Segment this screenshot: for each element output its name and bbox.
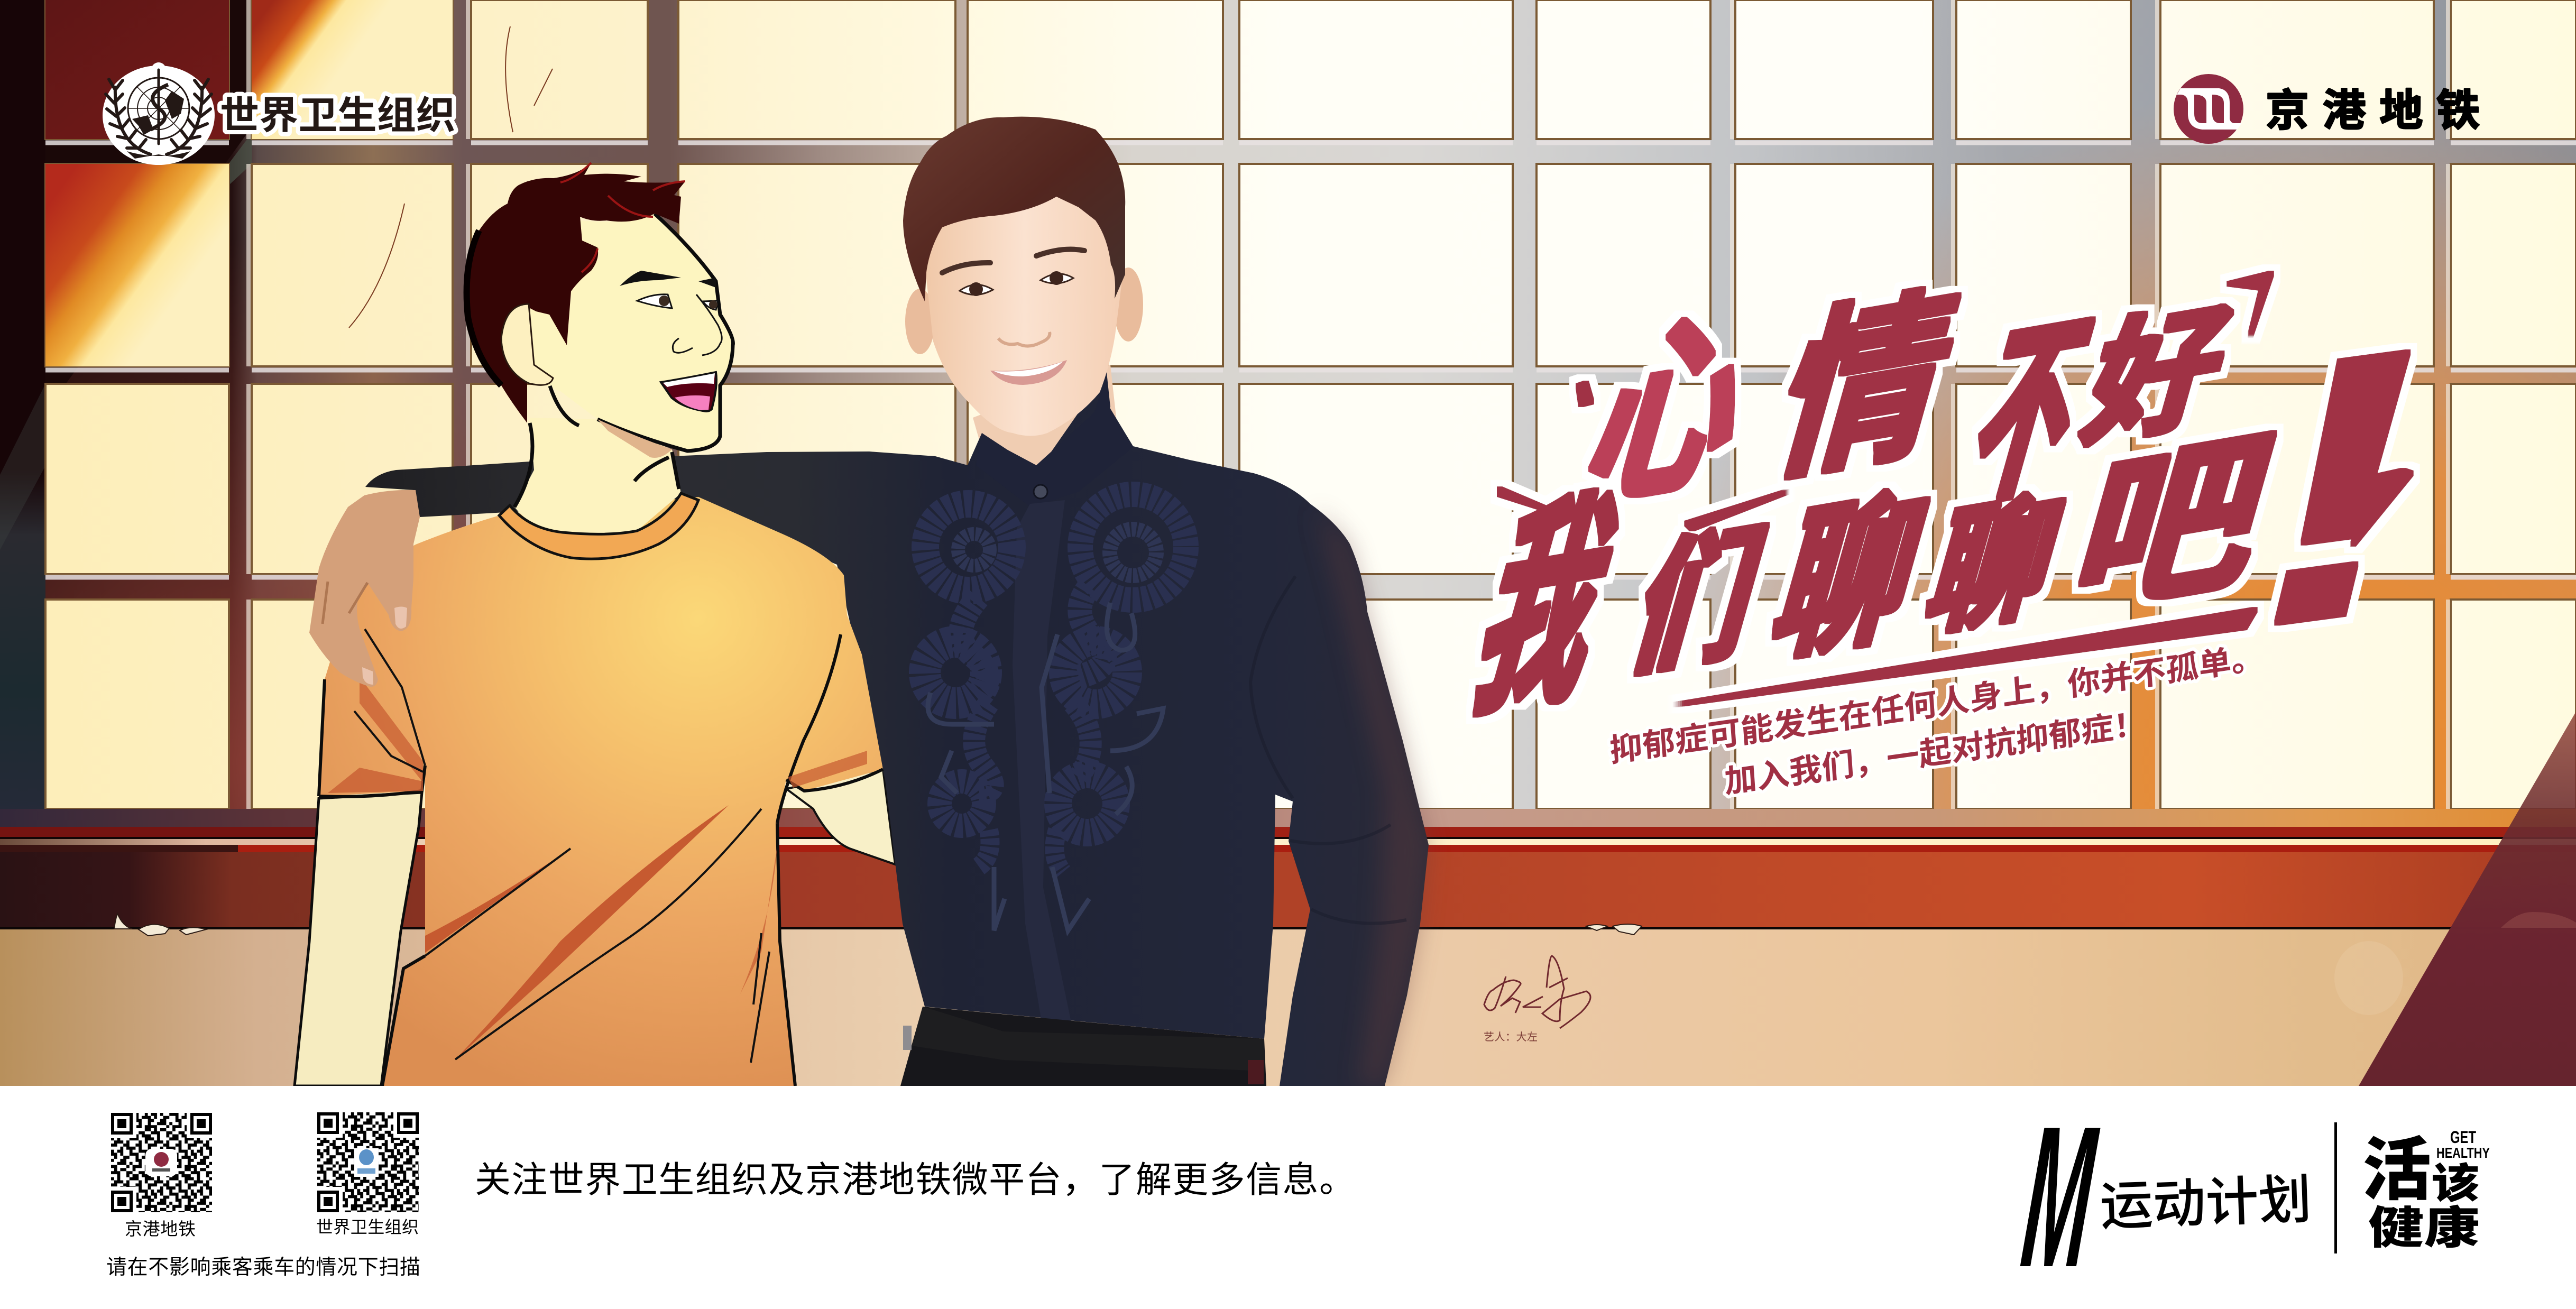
cartoon mouth (661, 372, 716, 411)
subtitle line 2: 加入我们，一起对抗抑郁症！ (1723, 705, 2147, 800)
window frame mullions (0, 0, 2576, 812)
cartoon right iris (709, 300, 717, 309)
real man figure (365, 117, 1429, 1086)
signature scribble (1484, 956, 1590, 1028)
QR code: WHO (316, 1112, 419, 1237)
shadow wedge lower right (2359, 712, 2576, 1086)
belt (912, 1007, 1264, 1071)
get healthy logo (2362, 1128, 2490, 1253)
real man left eye (960, 284, 993, 295)
collar (976, 372, 1133, 508)
WHO logo (103, 62, 455, 165)
brush M: M (2014, 1085, 2105, 1309)
belt buckle right (1248, 1060, 1264, 1084)
neck outlines (514, 423, 679, 507)
MTR emblem (2174, 74, 2243, 144)
headline accent shards (1499, 273, 2411, 705)
scan note: 请在不影响乘客乘车的情况下扫描 (106, 1256, 420, 1279)
main headline (1453, 263, 2473, 746)
cartoon left eye (637, 294, 672, 308)
headline line 2: 吧 (2054, 410, 2292, 639)
collar button (1034, 485, 1047, 499)
subtitle (1608, 639, 2265, 800)
headline line 1: 心 (1568, 291, 1773, 533)
GET label: GET (2450, 1128, 2476, 1147)
face outline right side (550, 214, 733, 451)
MTR logo (2174, 74, 2480, 144)
real man left iris (969, 282, 983, 296)
chipped paint flakes (114, 914, 1642, 936)
headline line 1: 不 (1951, 294, 2105, 532)
trousers (900, 1007, 1266, 1086)
headline line 2: 们 (1617, 510, 1778, 695)
sport plan wordmark: 运动计划 (2099, 1170, 2313, 1237)
headline line 1: 好 (2069, 288, 2244, 465)
hand knuckle shading (323, 582, 367, 624)
real man nose (998, 332, 1050, 346)
t-shirt collar (499, 493, 698, 559)
hair red highlights (560, 163, 685, 272)
cartoon left iris (659, 296, 669, 306)
hair left dark edge (467, 231, 501, 385)
logo divider (2334, 1122, 2337, 1253)
WHO emblem (103, 62, 215, 165)
artist credit: 艺人：大左 (1484, 1031, 1538, 1043)
HEALTHY label: HEALTHY (2436, 1145, 2490, 1161)
t-shirt fold shadows (328, 677, 867, 1059)
white footer (0, 1086, 2576, 1309)
headline line 2 (1453, 263, 2473, 746)
artist signature (1484, 956, 1590, 1043)
real man smile (990, 360, 1067, 385)
huo character: 活 (2362, 1131, 2431, 1209)
fingertip nails (362, 607, 407, 685)
WHO QR caption: 世界卫生组织 (316, 1218, 419, 1237)
QR code: MTR (111, 1113, 212, 1239)
ruffle appliques (925, 494, 1186, 930)
real man ears (905, 268, 1143, 354)
cartoon nose (673, 294, 722, 355)
neck (514, 418, 681, 534)
follow message: 关注世界卫生组织及京港地铁微平台，了解更多信息。 (475, 1160, 1355, 1200)
real man hair (903, 117, 1125, 301)
WHO QR pattern (317, 1112, 419, 1212)
cartoon face (529, 214, 733, 451)
jian kang characters: 健康 (2368, 1203, 2480, 1253)
belt buckle left (903, 1026, 912, 1050)
window panes (45, 0, 2576, 809)
sleeve warm rim light (1317, 508, 1429, 1086)
cartoon t-shirt (319, 497, 883, 1086)
cartoon right eye (703, 301, 718, 310)
sleeve folds (1250, 576, 1406, 924)
headline line 1 (1568, 270, 2244, 533)
real man brows (942, 250, 1084, 273)
real man right eye (1041, 274, 1073, 283)
sill and red wainscot band (0, 809, 2576, 929)
wall lens flare (2334, 941, 2403, 1015)
real man face (925, 190, 1124, 436)
subtitle line 1: 抑郁症可能发生在任何人身上，你并不孤单。 (1608, 639, 2265, 769)
t-shirt fold lines (354, 629, 769, 1063)
MTR QR pattern (111, 1113, 212, 1212)
headline line 2: 聊 (1911, 477, 2077, 654)
headline line 1: 情 (1757, 270, 1976, 505)
real man right iris (1050, 271, 1063, 285)
headline line 2: 我 (1453, 470, 1638, 746)
wedge chipped flake (2501, 912, 2576, 928)
cartoon near arm (295, 792, 422, 1086)
headline line 2: ! (2213, 263, 2473, 710)
real man teeth (994, 362, 1063, 376)
cartoon left brow (620, 271, 681, 286)
real man neck (973, 365, 1121, 486)
headline line 2: 聊 (1755, 472, 1943, 684)
illustrated friend's far forearm (786, 769, 895, 864)
cartoon teeth (663, 373, 715, 387)
shirt placket (1013, 500, 1074, 1035)
M sport plan logo (2014, 1085, 2313, 1309)
cartoon tongue (675, 395, 710, 410)
real man's hand on shoulder (309, 490, 420, 687)
cartoon right brow (698, 278, 716, 288)
gai character: 该 (2431, 1161, 2480, 1207)
wall below window (0, 929, 2576, 1086)
cartoon ear (501, 304, 553, 385)
real man shirt and arm (365, 372, 1429, 1086)
MTR name: 京港地铁 (2266, 87, 2480, 135)
MTR QR caption: 京港地铁 (125, 1219, 196, 1239)
t-shirt side outlines (319, 634, 883, 1086)
WHO name: 世界卫生组织 (220, 94, 455, 137)
cartoon hair (465, 163, 685, 423)
cartoon man figure (295, 163, 883, 1086)
jaw shadow (597, 419, 672, 458)
